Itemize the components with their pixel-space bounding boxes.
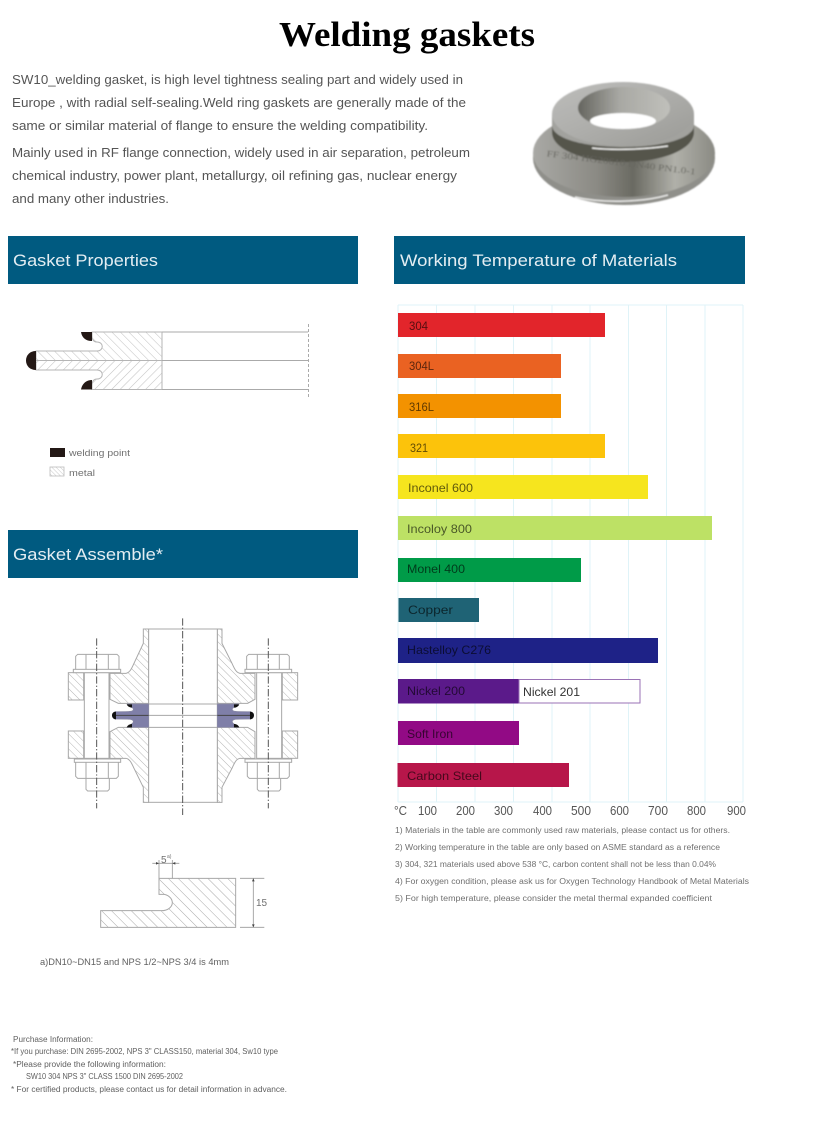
intro text: Mainly used in RF flange connection, widely used in air separation, petroleum: [12, 146, 470, 160]
chart notes: 2) Working temperature in the table are only based on ASME standard as a reference: [395, 843, 721, 852]
legend: metal: [50, 467, 95, 479]
bar: Copper: [398, 598, 479, 622]
heading: Gasket Properties: Gasket Properties: [13, 251, 158, 270]
bar: Inconel 600: [398, 475, 648, 499]
bar: Soft Iron: Soft Iron: [407, 727, 453, 741]
bar: Incoloy 800: [398, 516, 712, 540]
temperature axis labels: 900: [727, 804, 746, 818]
bar: Monel 400: Monel 400: [407, 562, 465, 576]
bar: Hastelloy C276: [398, 638, 658, 663]
temperature axis labels: [394, 804, 746, 818]
purchase information: Purchase Information:: [13, 1035, 93, 1044]
temperature axis labels: 700: [648, 804, 668, 818]
temperature axis labels: 600: [610, 804, 629, 818]
bar: Carbon Steel: [398, 763, 569, 787]
purchase information: *Please provide the following information:: [13, 1060, 166, 1069]
product photo: welding gasket: [533, 82, 715, 205]
chart notes: [395, 826, 749, 903]
temperature axis labels: 800: [687, 804, 706, 818]
purchase information: *If you purchase: DIN 2695-2002, NPS 3" CLASS150, material 304, Sw10 type: [11, 1047, 279, 1056]
bar: 304L: 304L: [409, 359, 434, 373]
bar: 321: 321: [410, 441, 428, 455]
bar: Copper: Copper: [408, 603, 453, 617]
diagram: gasket section dimensions: 5: [161, 855, 167, 866]
heading: Working Temperature of Materials: Working Temperature of Materials: [400, 251, 677, 270]
bar: Incoloy 800: Incoloy 800: [407, 522, 472, 536]
heading: Gasket Assemble: Gasket Assemble*: [13, 545, 163, 564]
bar: 304: 304: [409, 319, 428, 333]
chart notes: 3) 304, 321 materials used above 538 °C, carbon content shall not be less than 0.04%: [395, 860, 716, 869]
bar: 316L: [398, 394, 561, 418]
heading: Gasket Assemble: [8, 530, 358, 578]
intro text: SW10_welding gasket, is high level tightness sealing part and widely used in: [12, 73, 463, 87]
temperature axis labels: 200: [456, 804, 475, 818]
legend: welding point: welding point: [68, 448, 130, 459]
diagram: gasket assembly: [68, 618, 298, 815]
product photo: welding gasket: FF 304 HG20610 DN40 PN1.0-1: [546, 148, 696, 177]
chart notes: 4) For oxygen condition, please ask us for Oxygen Technology Handbook of Metal Materials: [395, 877, 749, 886]
chart notes: 1) Materials in the table are commonly used raw materials, please contact us for others.: [395, 826, 730, 835]
bar: Nickel 200 and Nickel 201: Nickel 200: [407, 684, 465, 698]
bar: Monel 400: [398, 558, 581, 582]
caption: DN size note: a)DN10~DN15 and NPS 1/2~NPS 3/4 is 4mm: [40, 957, 229, 968]
purchase information: [11, 1035, 287, 1094]
intro text: same or similar material of flange to ensure the welding compatibility.: [12, 119, 428, 133]
purchase information: * For certified products, please contact us for detail information in advance.: [11, 1085, 287, 1094]
temperature axis labels: 300: [494, 804, 513, 818]
legend: metal: metal: [69, 468, 95, 479]
bar: 304: [398, 313, 605, 337]
diagram: gasket section dimensions: 15: [256, 898, 268, 909]
bar: Nickel 200 and Nickel 201: [398, 679, 640, 704]
bar: Carbon Steel: Carbon Steel: [407, 769, 482, 783]
heading: Gasket Properties: [8, 236, 358, 284]
heading: Working Temperature of Materials: [394, 236, 745, 284]
temperature axis labels: 500: [571, 804, 591, 818]
chart notes: 5) For high temperature, please consider the metal thermal expanded coefficient: [395, 894, 713, 903]
purchase information: SW10 304 NPS 3" CLASS 1500 DIN 2695-2002: [26, 1072, 184, 1081]
bar: Nickel 200 and Nickel 201: Nickel 201: [523, 685, 580, 699]
diagram: gasket section dimensions: a): [167, 854, 172, 860]
bar: 304L: [398, 354, 561, 378]
intro text: [12, 73, 470, 206]
bar chart: working temperature of materials: [394, 305, 746, 818]
legend: welding point: [50, 448, 130, 459]
temperature axis labels: 400: [533, 804, 552, 818]
temperature axis labels: °C: [394, 804, 407, 818]
bar: 316L: 316L: [409, 400, 434, 414]
diagram: gasket section dimensions: [101, 854, 268, 927]
bar: Inconel 600: Inconel 600: [408, 481, 473, 495]
bar: Soft Iron: [398, 721, 519, 745]
bar: 321: [398, 434, 605, 458]
title: Welding gaskets: [279, 15, 535, 54]
intro text: chemical industry, power plant, metallurgy, oil refining gas, nuclear energy: [12, 169, 458, 183]
temperature axis labels: 100: [418, 804, 437, 818]
intro text: Europe , with radial self-sealing.Weld ring gaskets are generally made of the: [12, 96, 466, 110]
intro text: and many other industries.: [12, 192, 169, 206]
bar: Hastelloy C276: Hastelloy C276: [407, 643, 491, 657]
diagram: gasket cross-section: [26, 324, 308, 399]
